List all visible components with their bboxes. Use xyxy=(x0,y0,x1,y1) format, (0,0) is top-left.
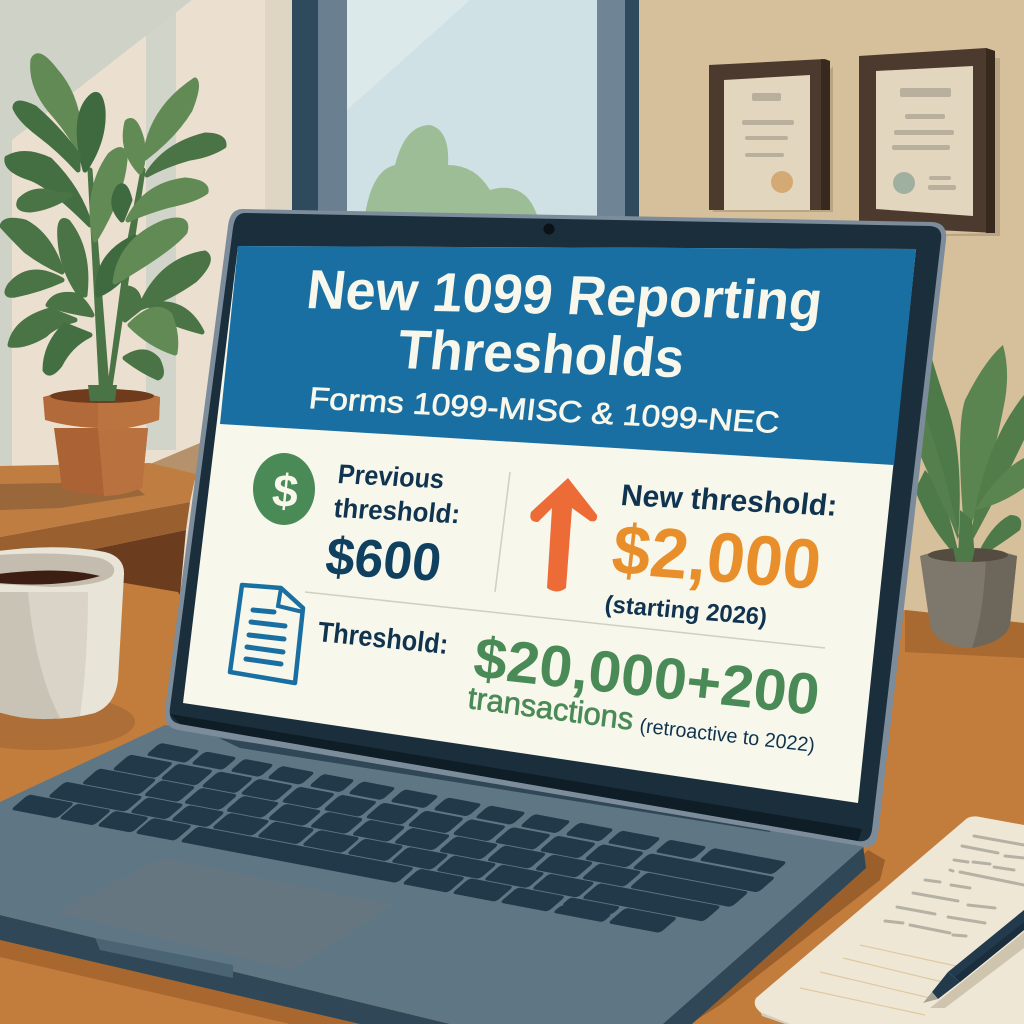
horizontal divider xyxy=(305,592,825,648)
icon: pen xyxy=(923,910,1024,1008)
third threshold label: Threshold: xyxy=(316,616,450,660)
window xyxy=(292,0,639,240)
icon: dollar coin: $ xyxy=(270,464,301,517)
vertical divider xyxy=(495,472,510,592)
icon: left potted plant xyxy=(2,56,224,496)
previous threshold label: Previous xyxy=(336,458,446,494)
icon: coffee cup xyxy=(0,547,135,750)
new value: $2,000 xyxy=(608,509,825,604)
previous threshold label: threshold: xyxy=(332,492,462,529)
hinge shadow xyxy=(219,738,775,832)
title line 1: New 1099 Reporting xyxy=(304,258,826,332)
keyboard xyxy=(13,733,790,940)
new threshold label: New threshold: xyxy=(619,479,839,523)
previous value: $600 xyxy=(323,527,444,593)
transactions label: transactions xyxy=(466,680,635,737)
subtitle: Forms 1099-MISC & 1099-NEC xyxy=(307,382,781,440)
framed certificate right xyxy=(859,48,1000,236)
icon: document xyxy=(230,585,303,683)
screen panel: white content xyxy=(183,246,916,803)
laptop base xyxy=(0,725,868,1024)
webcam xyxy=(544,224,554,234)
framed certificate left xyxy=(709,59,833,212)
icon: up arrow xyxy=(530,478,597,592)
retroactive note: (retroactive to 2022) xyxy=(638,715,816,757)
shelf behind xyxy=(0,443,200,595)
notebook xyxy=(755,816,1024,1024)
icon: dollar coin xyxy=(253,453,315,525)
trackpad lip xyxy=(95,938,233,978)
starting note: (starting 2026) xyxy=(603,591,768,631)
third value: $20,000+200 xyxy=(471,625,823,728)
icon: right potted plant xyxy=(915,345,1024,648)
trackpad xyxy=(56,858,393,970)
laptop screen bezel xyxy=(165,209,946,847)
title line 2: Thresholds xyxy=(395,318,688,389)
previous threshold label xyxy=(332,458,462,529)
header panel: blue xyxy=(220,246,916,465)
desk xyxy=(0,583,1024,1024)
